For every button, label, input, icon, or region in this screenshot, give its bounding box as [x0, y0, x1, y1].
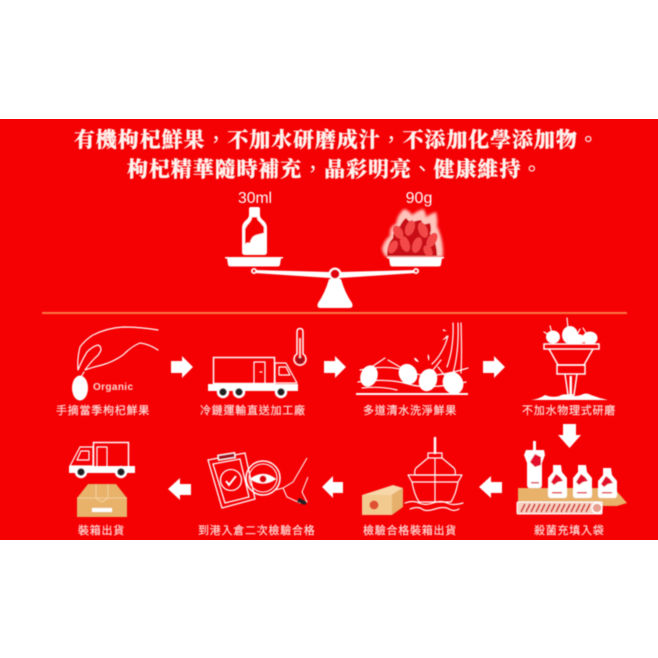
arrow left — [322, 476, 343, 498]
label: 裝箱出貨 — [78, 523, 125, 537]
right pan — [387, 257, 444, 266]
step 2: cold chain truck — [200, 328, 306, 417]
icon: conveyor — [517, 488, 627, 514]
icon: pouches — [524, 441, 617, 498]
icon: magnifier — [246, 458, 308, 505]
label: 檢驗合格裝箱出貨 — [363, 523, 457, 537]
step 4: grinding — [522, 318, 616, 417]
beam — [254, 270, 416, 278]
icon: bottle — [242, 207, 267, 255]
label: 殺菌充填入袋 — [534, 523, 604, 537]
title: 有機枸杞鮮果，不加水研磨成汁，不添加化學添加物。 — [74, 124, 600, 154]
icon: box — [77, 484, 127, 517]
icon: thermometer — [294, 328, 306, 365]
step 3: washing — [356, 323, 468, 417]
icon: ship — [405, 438, 463, 510]
icon: truck — [208, 358, 298, 397]
arrow — [171, 356, 193, 378]
icon: grinder — [531, 318, 608, 400]
base — [317, 279, 353, 308]
step 6: shipping — [362, 438, 463, 537]
label: 手摘當季枸杞鮮果 — [56, 403, 150, 417]
divider — [42, 312, 627, 314]
arrow left — [168, 478, 191, 500]
title — [74, 124, 600, 184]
step 7: inspection — [198, 453, 316, 537]
title: 枸杞精華隨時補充，晶彩明亮、健康維持。 — [127, 154, 543, 184]
label: 90g: 90g — [406, 190, 432, 207]
icon: berry — [72, 376, 88, 400]
arrow left — [479, 476, 502, 498]
icon: truck reversed — [69, 442, 135, 477]
label: 多道清水洗淨鮮果 — [363, 403, 457, 417]
label: 冷鏈運輸直送加工廠 — [200, 403, 306, 417]
step 8: delivery — [69, 442, 135, 537]
label: 到港入倉二次檢驗合格 — [198, 523, 316, 537]
scale comparison — [225, 190, 444, 308]
icon: clipboard — [208, 453, 255, 508]
icon: cargo box — [362, 485, 403, 515]
arrow — [483, 356, 505, 378]
arrow down — [558, 424, 581, 448]
icon: water and berries — [356, 323, 468, 398]
icon: hand — [78, 327, 158, 382]
icon: goji berry pile — [382, 209, 443, 258]
panel: content — [42, 124, 627, 537]
text: Organic: Organic — [93, 382, 133, 393]
red panel background — [0, 119, 658, 540]
step 5: filling — [517, 441, 627, 537]
arrow — [324, 356, 346, 378]
step 1: hand picking — [56, 327, 158, 417]
left pan — [225, 257, 283, 266]
label: 不加水物理式研磨 — [522, 403, 616, 417]
label: 30ml: 30ml — [238, 190, 272, 207]
